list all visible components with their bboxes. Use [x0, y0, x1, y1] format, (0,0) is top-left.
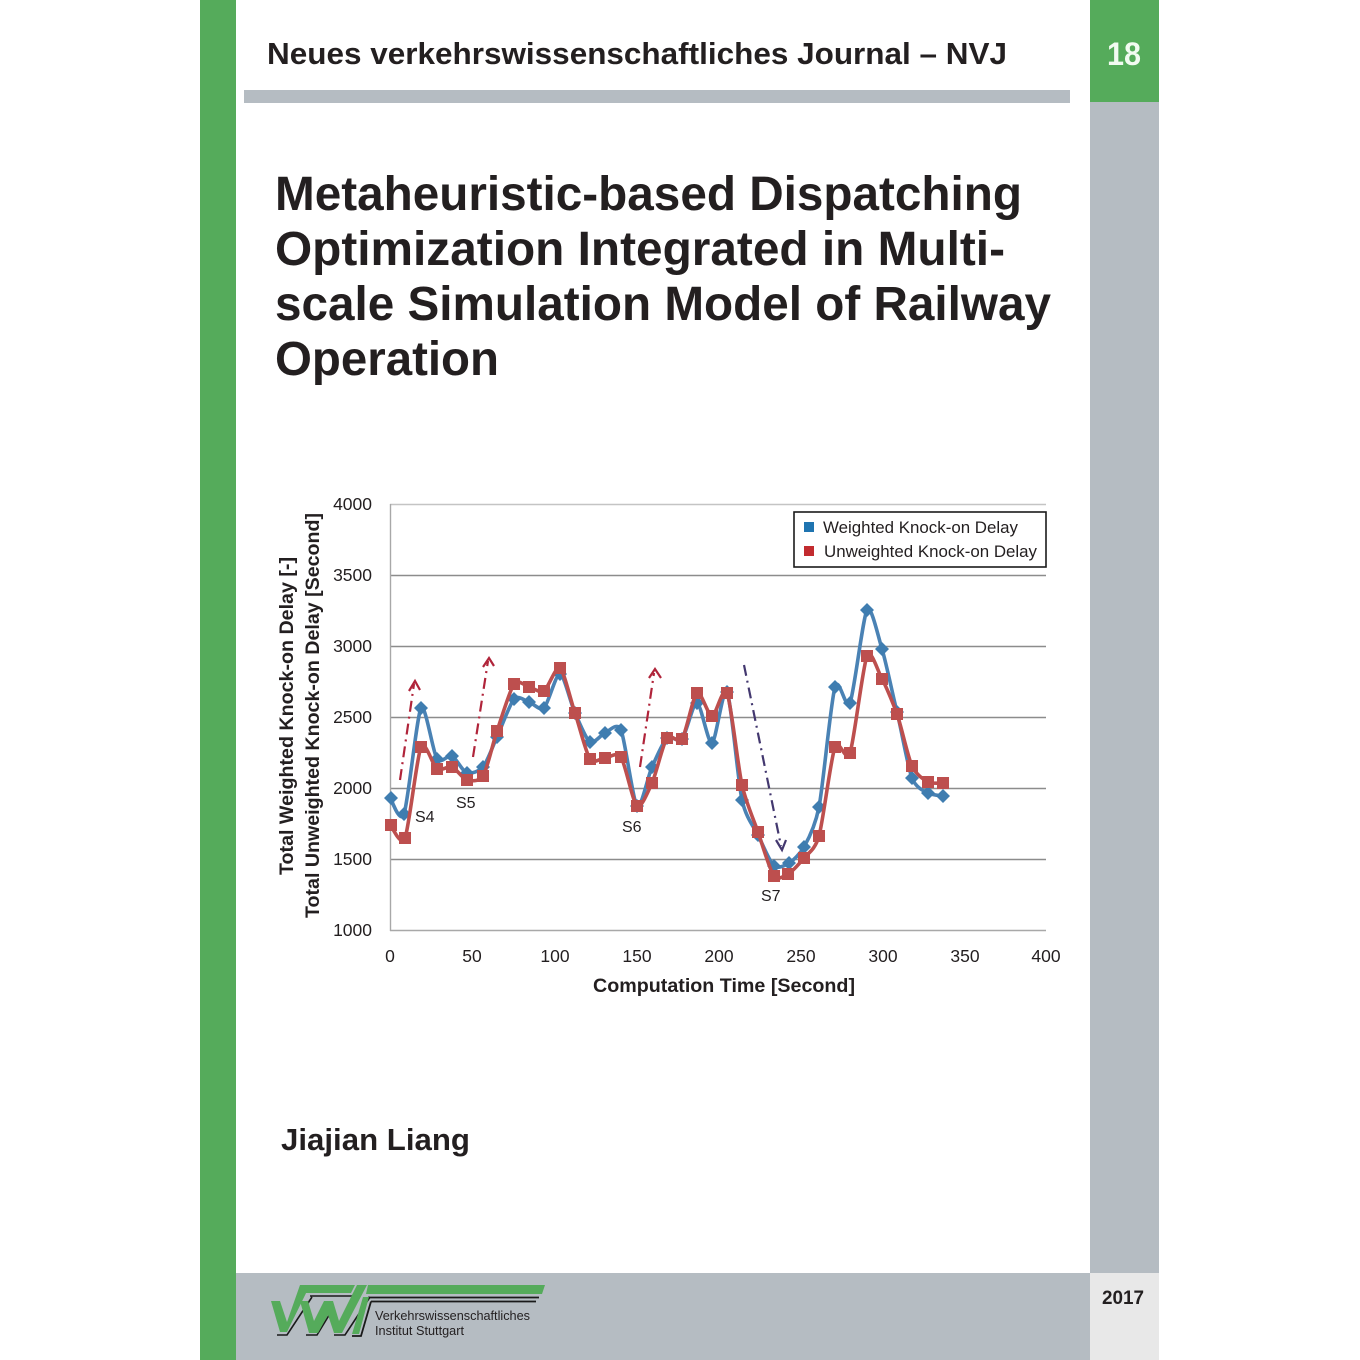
x axis tick labels: [385, 946, 1061, 966]
legend: Weighted Knock-on Delay: [823, 518, 1018, 537]
x axis tick labels: 150: [622, 946, 652, 966]
footer band: [236, 1273, 1090, 1360]
arrow: rise at S5: [473, 658, 494, 757]
x axis tick labels: 50: [462, 946, 482, 966]
y axis tick labels: [333, 494, 372, 940]
x axis tick labels: 350: [950, 946, 980, 966]
year block: 2017: [1102, 1288, 1144, 1309]
title: Metaheuristic-based Dispatching: [275, 168, 1022, 221]
x axis tick labels: 400: [1031, 946, 1061, 966]
title: Optimization Integrated in Multi-: [275, 223, 1005, 276]
y axis tick labels: 2500: [333, 707, 372, 727]
line chart: [277, 494, 1061, 997]
y axis tick labels: 3000: [333, 636, 372, 656]
y axis tick labels: 2000: [333, 778, 372, 798]
year block: [1090, 1273, 1159, 1360]
journal heading: Neues verkehrswissenschaftliches Journal – NVJ: [267, 36, 1007, 71]
scenario labels: S6: [622, 819, 642, 836]
series number block: 18: [1107, 36, 1141, 72]
VWI institute logo: [271, 1285, 545, 1338]
VWI institute logo: Institut Stuttgart: [375, 1324, 465, 1338]
title: [275, 168, 1051, 386]
scenario labels: S7: [761, 888, 781, 905]
x axis tick labels: 0: [385, 946, 395, 966]
arrow: rise at S4: [400, 681, 420, 780]
legend: [794, 512, 1046, 567]
y axis titles: [277, 513, 324, 918]
scenario labels: S5: [456, 795, 476, 812]
x axis tick labels: 200: [704, 946, 734, 966]
y axis tick labels: 1500: [333, 849, 372, 869]
title: Operation: [275, 333, 499, 386]
y axis titles: Total Weighted Knock-on Delay [-]: [277, 557, 298, 875]
y axis titles: Total Unweighted Knock-on Delay [Second]: [303, 513, 324, 918]
y axis tick labels: 1000: [333, 920, 372, 940]
scenario labels: [415, 795, 781, 905]
author: Jiajian Liang: [281, 1122, 470, 1157]
VWI institute logo: Verkehrswissenschaftliches: [375, 1309, 530, 1323]
x axis title: Computation Time [Second]: [593, 976, 855, 997]
arrow: rise at S6: [640, 669, 661, 767]
series: weighted knock-on delay (blue): [384, 603, 950, 873]
x axis tick labels: 100: [540, 946, 570, 966]
series: unweighted knock-on delay (red): [391, 654, 943, 878]
right grey column: [1090, 0, 1159, 1360]
y axis tick labels: 3500: [333, 565, 372, 585]
scenario labels: S4: [415, 809, 435, 826]
header rule: [244, 90, 1070, 103]
x axis tick labels: 250: [786, 946, 816, 966]
x axis tick labels: 300: [868, 946, 898, 966]
legend: Unweighted Knock-on Delay: [824, 542, 1037, 561]
title: scale Simulation Model of Railway: [275, 278, 1051, 331]
arrow: fall at S7: [744, 665, 786, 850]
y axis tick labels: 4000: [333, 494, 372, 514]
series number block: [1090, 0, 1159, 102]
left green spine bar: [200, 0, 236, 1360]
